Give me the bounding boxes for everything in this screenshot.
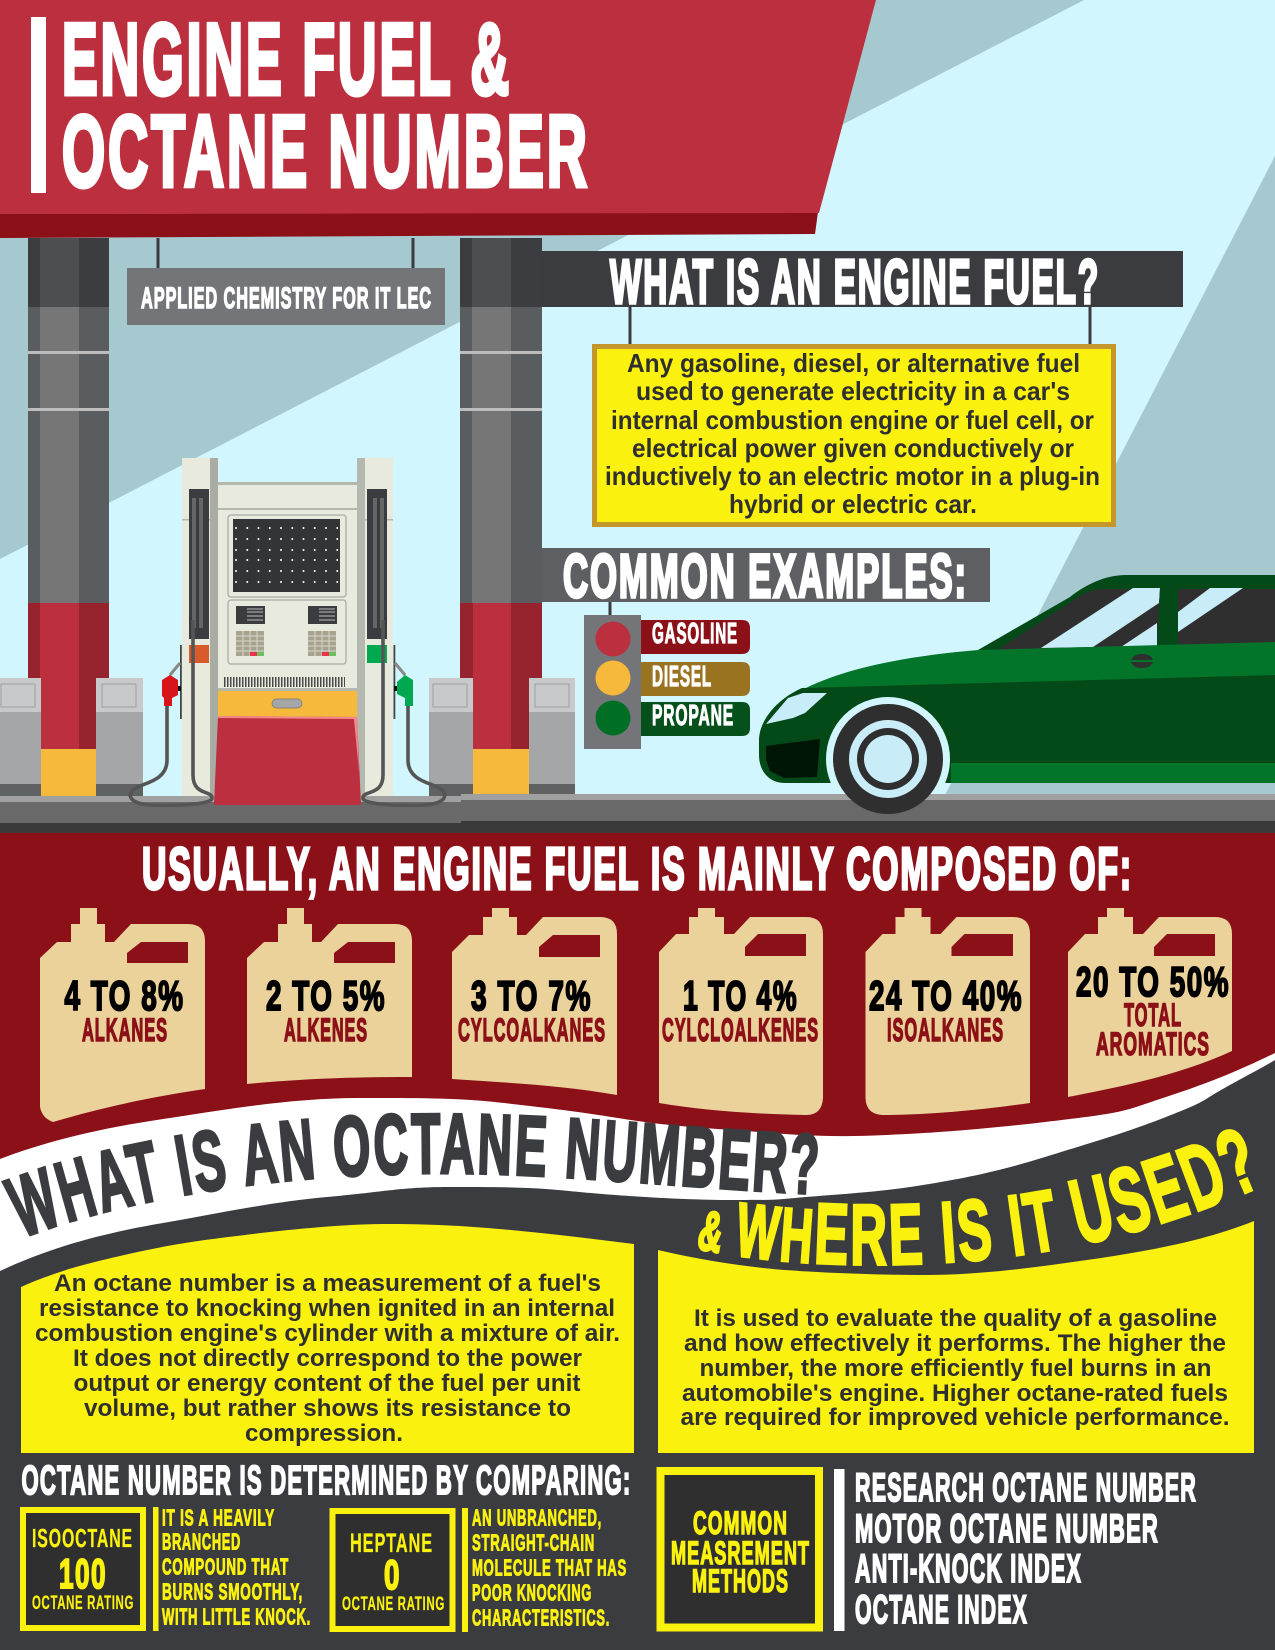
jug: cycloalkenes xyxy=(659,908,823,1115)
heading: common examples: COMMON EXAMPLES: xyxy=(563,542,968,610)
jug: total aromatics: TOTAL xyxy=(1124,997,1182,1033)
text: isooctane description: COMPOUND THAT xyxy=(162,1554,289,1580)
jug: isoalkanes xyxy=(866,908,1030,1115)
panel: where octane number is used: It is used to evaluate the quality of a gasoline xyxy=(694,1305,1217,1332)
heading: common examples xyxy=(542,542,990,610)
text: measurement methods list: ANTI-KNOCK INDEX xyxy=(855,1547,1082,1591)
jug: isoalkanes: 24 TO 40% xyxy=(869,972,1023,1019)
card: heptane: HEPTANE xyxy=(350,1528,433,1558)
panel: octane number definition: An octane number is a measurement of a fuel's xyxy=(54,1270,601,1297)
text: heptane description: STRAIGHT-CHAIN xyxy=(472,1530,595,1556)
jug: cycloalkanes: CYLCOALKANES xyxy=(458,1012,606,1048)
panel: composition background xyxy=(0,833,1275,1193)
text: heptane description: MOLECULE THAT HAS xyxy=(472,1554,627,1580)
jug: cycloalkanes xyxy=(452,908,617,1095)
panel: engine fuel definition: used to generate electricity in a car's xyxy=(636,376,1070,406)
text: isooctane description: BRANCHED xyxy=(162,1528,241,1554)
sign: course label: APPLIED CHEMISTRY FOR IT LEC xyxy=(141,282,432,315)
jug: alkenes xyxy=(247,908,412,1084)
label: gasoline xyxy=(641,618,750,654)
text: isooctane description: IT IS A HEAVILY xyxy=(162,1504,275,1530)
jug: cycloalkenes: 1 TO 4% xyxy=(683,972,798,1019)
card: common measurement methods: COMMON xyxy=(693,1505,788,1541)
title accent bar xyxy=(31,17,46,193)
jug: alkanes xyxy=(40,908,205,1122)
panel: where octane number is used: and how effectively it performs. The higher the xyxy=(684,1330,1226,1357)
text: heptane description: POOR KNOCKING xyxy=(472,1580,592,1606)
text: isooctane description xyxy=(153,1504,311,1631)
jug: alkanes: 4 TO 8% xyxy=(64,972,184,1019)
label: gasoline: GASOLINE xyxy=(652,618,738,650)
white wave ribbon xyxy=(0,1053,1275,1300)
panel: where octane number is used: automobile's engine. Higher octane-rated fuels xyxy=(682,1380,1228,1407)
card: isooctane: 100 xyxy=(59,1550,107,1597)
dark lower panel xyxy=(0,1060,1275,1650)
panel: where octane number is used: number, the more efficiently fuel burns in an xyxy=(700,1355,1212,1382)
panel: octane number definition: compression. xyxy=(245,1420,403,1447)
panel: engine fuel definition: Any gasoline, diesel, or alternative fuel xyxy=(627,348,1080,378)
text: heptane description: CHARACTERISTICS. xyxy=(472,1604,610,1630)
card: isooctane: OCTANE RATING xyxy=(32,1593,134,1614)
card: heptane xyxy=(332,1511,452,1629)
header banner xyxy=(0,0,876,238)
card: common measurement methods: MEASREMENT xyxy=(671,1535,810,1571)
jug: alkanes: ALKANES xyxy=(82,1012,168,1048)
column: right canopy pillar xyxy=(460,238,542,796)
panel: where octane number is used xyxy=(658,1221,1254,1453)
panel: engine fuel definition: electrical power given conductively or xyxy=(632,433,1074,463)
panel: engine fuel definition: hybrid or electric car. xyxy=(729,489,977,519)
card: heptane: 0 xyxy=(384,1551,401,1598)
text: measurement methods list: OCTANE INDEX xyxy=(855,1588,1028,1632)
card: common measurement methods xyxy=(660,1471,819,1628)
title xyxy=(62,4,590,208)
jug: cycloalkanes: 3 TO 7% xyxy=(471,972,592,1019)
panel: octane number definition: volume, but rather shows its resistance to xyxy=(84,1395,571,1422)
title: OCTANE NUMBER xyxy=(62,96,590,208)
jug: cycloalkenes: CYLCLOALKENES xyxy=(662,1012,819,1048)
traffic light with fuel examples xyxy=(584,602,750,749)
text: heptane description: AN UNBRANCHED, xyxy=(472,1504,602,1530)
text: measurement methods list xyxy=(834,1466,1197,1632)
card: isooctane xyxy=(23,1510,143,1628)
title: ENGINE FUEL & xyxy=(62,4,512,116)
jug: isoalkanes: ISOALKANES xyxy=(887,1012,1004,1048)
label: propane xyxy=(641,700,750,736)
panel: engine fuel definition xyxy=(594,346,1114,524)
car xyxy=(759,575,1275,821)
icon: car wheel xyxy=(833,704,943,814)
card: heptane: OCTANE RATING xyxy=(342,1594,445,1615)
jug: alkenes: ALKENES xyxy=(284,1012,368,1048)
panel: octane number definition: output or energy content of the fuel per unit xyxy=(74,1370,580,1397)
column: left canopy pillar xyxy=(28,238,109,796)
card: isooctane: ISOOCTANE xyxy=(32,1525,133,1553)
label: propane: PROPANE xyxy=(652,700,734,732)
jug: total aromatics xyxy=(1068,908,1232,1097)
card: common measurement methods: METHODS xyxy=(692,1563,789,1599)
panel: engine fuel definition: inductively to an electric motor in a plug-in xyxy=(605,461,1100,491)
jug: alkenes: 2 TO 5% xyxy=(266,972,386,1019)
text: isooctane description: WITH LITTLE KNOCK. xyxy=(162,1604,311,1630)
text: heptane description xyxy=(462,1504,627,1632)
sign: course label xyxy=(127,238,445,325)
road xyxy=(0,794,1275,833)
hangers for definition box xyxy=(628,307,1092,344)
panel: engine fuel definition: internal combustion engine or fuel cell, or xyxy=(611,405,1094,435)
panel: octane number definition: It does not directly correspond to the power xyxy=(73,1345,582,1372)
icon: fuel pump xyxy=(130,458,445,805)
panel: where octane number is used: are required for improved vehicle performance. xyxy=(680,1404,1230,1431)
text: isooctane description: BURNS SMOOTHLY, xyxy=(162,1578,303,1604)
heading: octane number comparison: OCTANE NUMBER IS DETERMINED BY COMPARING: xyxy=(22,1457,632,1503)
barrier boxes beside the pillars xyxy=(0,678,575,796)
heading: what is an octane number: WHAT IS AN OCTANE NUMBER? xyxy=(1,1112,818,1236)
panel: octane number definition: resistance to knocking when ignited in an internal xyxy=(39,1295,615,1322)
panel: octane number definition: combustion engine's cylinder with a mixture of air. xyxy=(35,1320,620,1347)
label: diesel: DIESEL xyxy=(652,661,712,693)
panel: octane number definition xyxy=(21,1224,634,1453)
